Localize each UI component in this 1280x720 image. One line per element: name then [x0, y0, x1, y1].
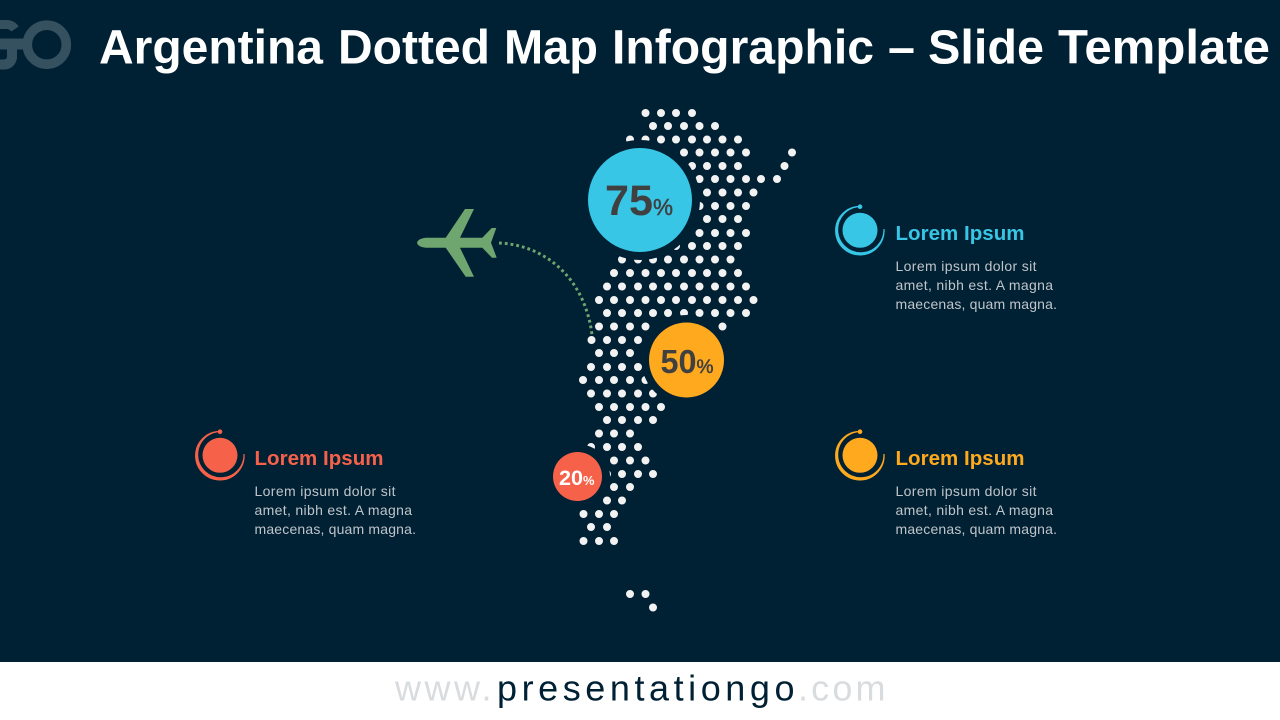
badge: 75 percent: % [653, 194, 673, 220]
heading: Lorem Ipsum [896, 222, 1024, 245]
title: – [888, 22, 915, 74]
body text: maecenas, quam magna. [896, 296, 1057, 312]
title: Infographic [612, 22, 874, 74]
title: Dotted [338, 22, 490, 74]
title: Argentina [99, 22, 323, 74]
body text: maecenas, quam magna. [254, 521, 416, 537]
footer band [0, 662, 1280, 720]
badge: 20 percent [545, 444, 610, 509]
body text: Lorem ipsum dolor sit [254, 483, 396, 499]
body text: amet, nibh est. A magna [254, 502, 412, 518]
badge: 50 percent [642, 315, 732, 405]
body text [896, 483, 1057, 537]
title: Map [504, 22, 598, 74]
heading: Lorem Ipsum [254, 447, 384, 470]
icon: orange orbit [836, 429, 884, 480]
heading: Lorem Ipsum [896, 447, 1024, 470]
body text: Lorem ipsum dolor sit [896, 258, 1037, 274]
footer band: .com [798, 668, 888, 708]
dotted map of Argentina [583, 113, 792, 608]
badge: 75 percent [580, 140, 700, 260]
title: Slide [928, 22, 1044, 74]
icon: red orbit [196, 429, 244, 480]
body text [254, 483, 416, 537]
footer band: www. [394, 668, 494, 708]
footer band: presentationgo [497, 668, 797, 708]
title [99, 22, 1270, 74]
flight path [499, 243, 592, 335]
panel: blue item [836, 204, 1057, 312]
body text: amet, nibh est. A magna [896, 502, 1053, 518]
panel: red item [196, 429, 416, 537]
title: Template [1058, 22, 1270, 74]
logo mark [0, 24, 66, 64]
icon: blue orbit [836, 204, 884, 255]
panel: orange item [836, 429, 1057, 537]
body text: amet, nibh est. A magna [896, 277, 1053, 293]
badge: 50 percent: % [696, 357, 714, 378]
body text: Lorem ipsum dolor sit [896, 483, 1037, 499]
badge: 50 percent: 50 [660, 343, 696, 380]
body text [896, 258, 1057, 312]
icon: airplane [417, 209, 497, 277]
body text: maecenas, quam magna. [896, 521, 1057, 537]
badge: 75 percent: 75 [605, 177, 653, 225]
badge: 20 percent: % [583, 473, 595, 488]
badge: 20 percent: 20 [559, 467, 583, 490]
